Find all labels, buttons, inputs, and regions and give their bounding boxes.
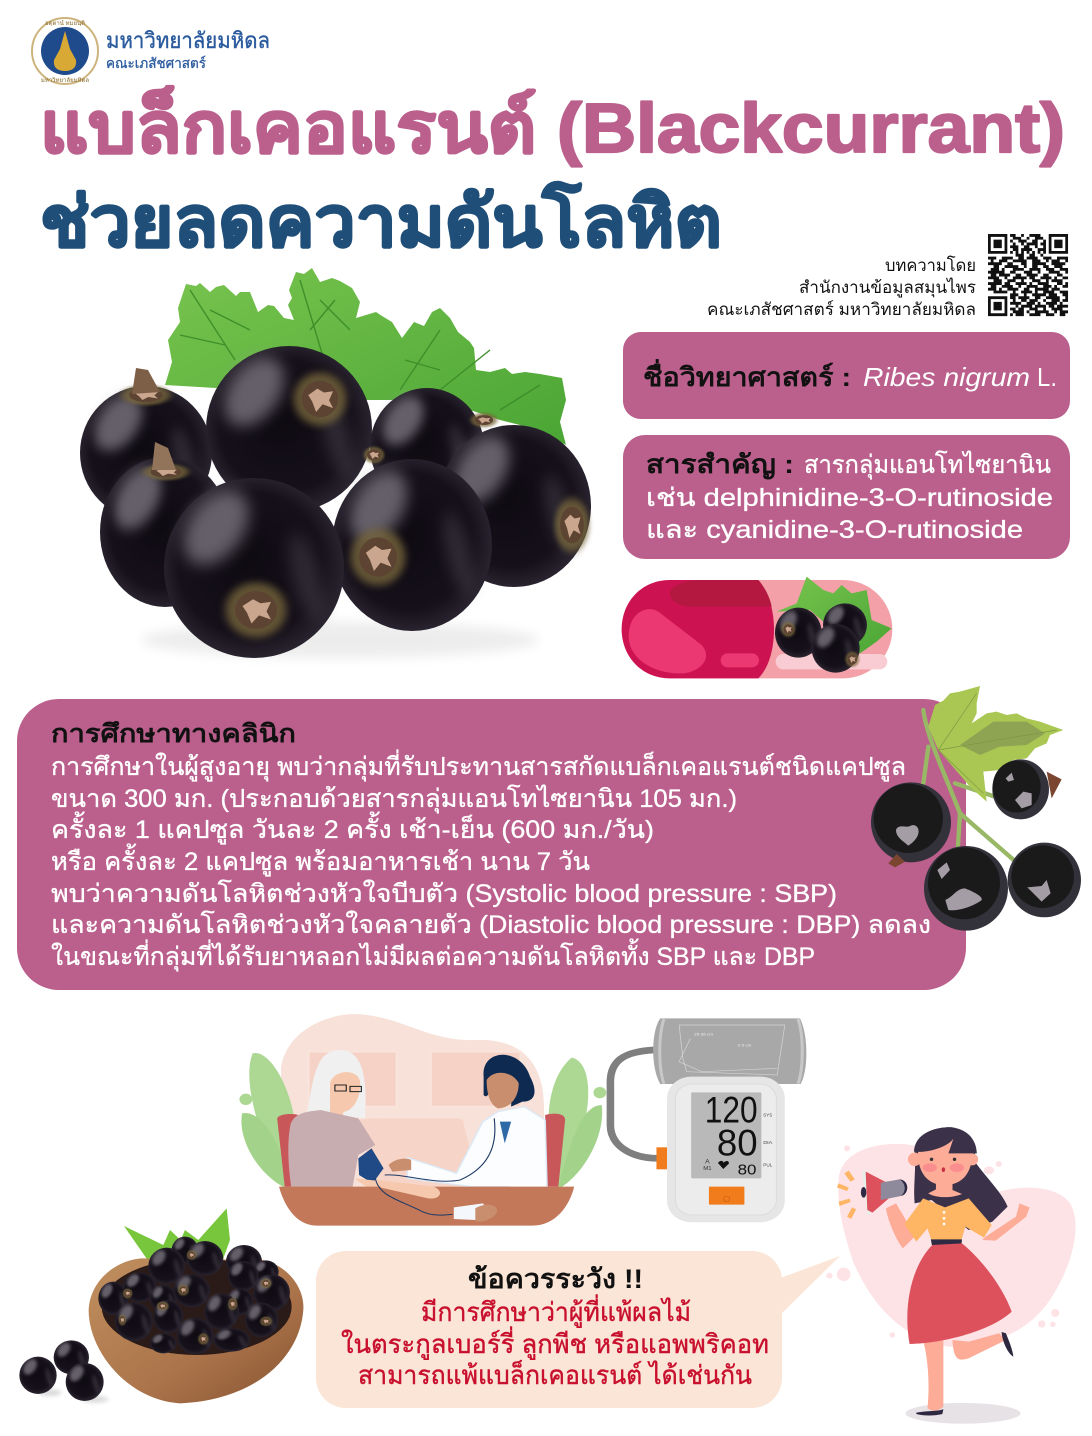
logo: Mahidol University: มหาวิทยาลัยมหิดล <box>41 77 89 84</box>
QR code <box>988 235 1068 315</box>
skirt <box>907 1243 1012 1344</box>
logo: Mahidol University: มหาวิทยาลัยมหิดล <box>106 28 270 53</box>
pink blob <box>838 1144 1076 1347</box>
illustration: doctor measuring blood pressure <box>239 1014 606 1226</box>
panel: clinical study: การศึกษาทางคลินิก <box>51 720 296 748</box>
background blob <box>281 1014 544 1187</box>
title: แบล็กเคอแรนต์ (Blackcurrant) <box>40 85 1065 167</box>
neck and head <box>928 1182 962 1197</box>
callout: warning: ข้อควรระวัง !! <box>468 1264 643 1294</box>
illustration: blackcurrant branch <box>871 686 1081 931</box>
callout: warning: มีการศึกษาว่าผู้ที่แพ้ผลไม้ <box>421 1294 691 1328</box>
loose berries <box>19 1340 108 1403</box>
credit text: สำนักงานข้อมูลสมุนไพร <box>799 277 976 298</box>
panel: scientific name: Ribes nigrum <box>863 362 1030 392</box>
berry back left <box>80 386 212 520</box>
credit text: บทความโดย <box>885 255 976 275</box>
panel: clinical study: และความดันโลหิตช่วงหัวใจคลายตัว (Diastolic blood pressure : DBP) ลดลง <box>51 910 931 939</box>
berry centre top <box>206 346 372 512</box>
panel: active compounds <box>623 435 1070 559</box>
capsule with berries <box>622 577 892 678</box>
illustration: blood pressure monitor: DIA <box>763 1140 773 1146</box>
illustration: blood pressure monitor: PUL <box>763 1163 773 1169</box>
panel: clinical study: ขนาด 300 มก. (ประกอบด้วยสารกลุ่มแอนโทไซยานิน 105 มก.) <box>51 784 737 814</box>
panel: clinical study <box>17 699 966 990</box>
photo: blackcurrant berries with leaves <box>80 268 591 658</box>
megaphone sound marks <box>837 1171 856 1219</box>
patient <box>307 1050 366 1118</box>
panel: clinical study: ในขณะที่กลุ่มที่ได้รับยาหลอกไม่มีผลต่อความดันโลหิตทั้ง SBP และ DBP <box>51 938 815 972</box>
chairs <box>277 1114 298 1187</box>
legs <box>923 1340 943 1411</box>
photo: bowl of blackcurrants <box>19 1208 303 1403</box>
panel: clinical study: พบว่าความดันโลหิตช่วงหัวใจบีบตัว (Systolic blood pressure : SBP) <box>51 879 837 908</box>
panel: active compounds: สารสำคัญ : <box>646 449 794 480</box>
panel: active compounds: เช่น delphinidine-3-O-rutinoside <box>646 484 1053 512</box>
arms <box>886 1203 918 1248</box>
panel: scientific name: L. <box>1037 362 1057 392</box>
belt <box>931 1239 962 1247</box>
shadow <box>140 622 540 658</box>
credit text <box>707 255 976 319</box>
logo: Mahidol University: คณะเภสัชศาสตร์ <box>106 55 206 71</box>
megaphone <box>862 1171 871 1214</box>
panel: clinical study: หรือ ครั้งละ 2 แคปซูล พร้อมอาหารเช้า นาน 7 วัน <box>51 843 590 877</box>
illustration: blood pressure monitor: 80 <box>738 1161 757 1178</box>
berries in bowl <box>98 1237 290 1354</box>
arm <box>355 1178 439 1197</box>
illustration: blood pressure monitor <box>610 1018 806 1222</box>
illustration: blood pressure monitor: 25-36 cm <box>694 1032 714 1037</box>
shadow <box>906 1403 1020 1424</box>
logo: Mahidol University <box>32 18 270 84</box>
leaves <box>165 268 566 445</box>
illustration: blood pressure monitor: 80 <box>717 1124 758 1164</box>
calyxes <box>122 368 589 638</box>
doctor <box>483 1055 535 1107</box>
plants <box>239 1053 606 1187</box>
credit text: คณะเภสัชศาสตร์ มหาวิทยาลัยมหิดล <box>707 300 976 319</box>
title <box>40 85 1065 261</box>
panel: scientific name <box>623 332 1070 419</box>
illustration: woman with megaphone <box>826 1127 1076 1424</box>
callout: warning: ในตระกูลเบอร์รี่ ลูกพีช หรือแอพพริคอท <box>341 1326 769 1360</box>
illustration: blood pressure monitor: M1 <box>703 1166 712 1172</box>
panel: active compounds: และ cyanidine-3-O-rutinoside <box>646 516 1023 544</box>
berry back right <box>370 388 484 506</box>
table <box>279 1187 574 1226</box>
callout: warning: สามารถแพ้แบล็กเคอแรนต์ ได้เช่นกัน <box>358 1359 752 1390</box>
panel: clinical study: ครั้งละ 1 แคปซูล วันละ 2 ครั้ง เช้า-เย็น (600 มก./วัน) <box>51 811 654 845</box>
panel: clinical study: การศึกษาในผู้สูงอายุ พบว่ากลุ่มที่รับประทานสารสกัดแบล็กเคอแรนต์ชนิดแคปซูล <box>51 749 906 782</box>
berry left <box>100 457 230 607</box>
callout: warning <box>316 1251 840 1408</box>
illustration: blood pressure monitor: 2-3 cm <box>738 1043 752 1048</box>
leaves <box>124 1208 230 1263</box>
illustration: blood pressure monitor: 120 <box>705 1091 758 1131</box>
illustration: blood pressure monitor: A <box>705 1159 710 1165</box>
title: ช่วยลดความดันโลหิต <box>40 181 722 261</box>
berry centre right <box>332 459 492 631</box>
bowl interior <box>102 1258 292 1355</box>
hair <box>914 1127 1008 1230</box>
illustration: blood pressure monitor: SYS <box>763 1113 773 1119</box>
blouse <box>904 1198 992 1242</box>
berry right <box>437 425 591 587</box>
bowl <box>89 1258 303 1403</box>
panel: active compounds: สารกลุ่มแอนโทไซยานิน <box>804 450 1051 480</box>
panel: scientific name: ชื่อวิทยาศาสตร์ : <box>643 358 851 392</box>
logo: Mahidol University: อตฺตานํ ทมยนฺติ <box>45 20 85 27</box>
berry bottom <box>164 478 344 658</box>
